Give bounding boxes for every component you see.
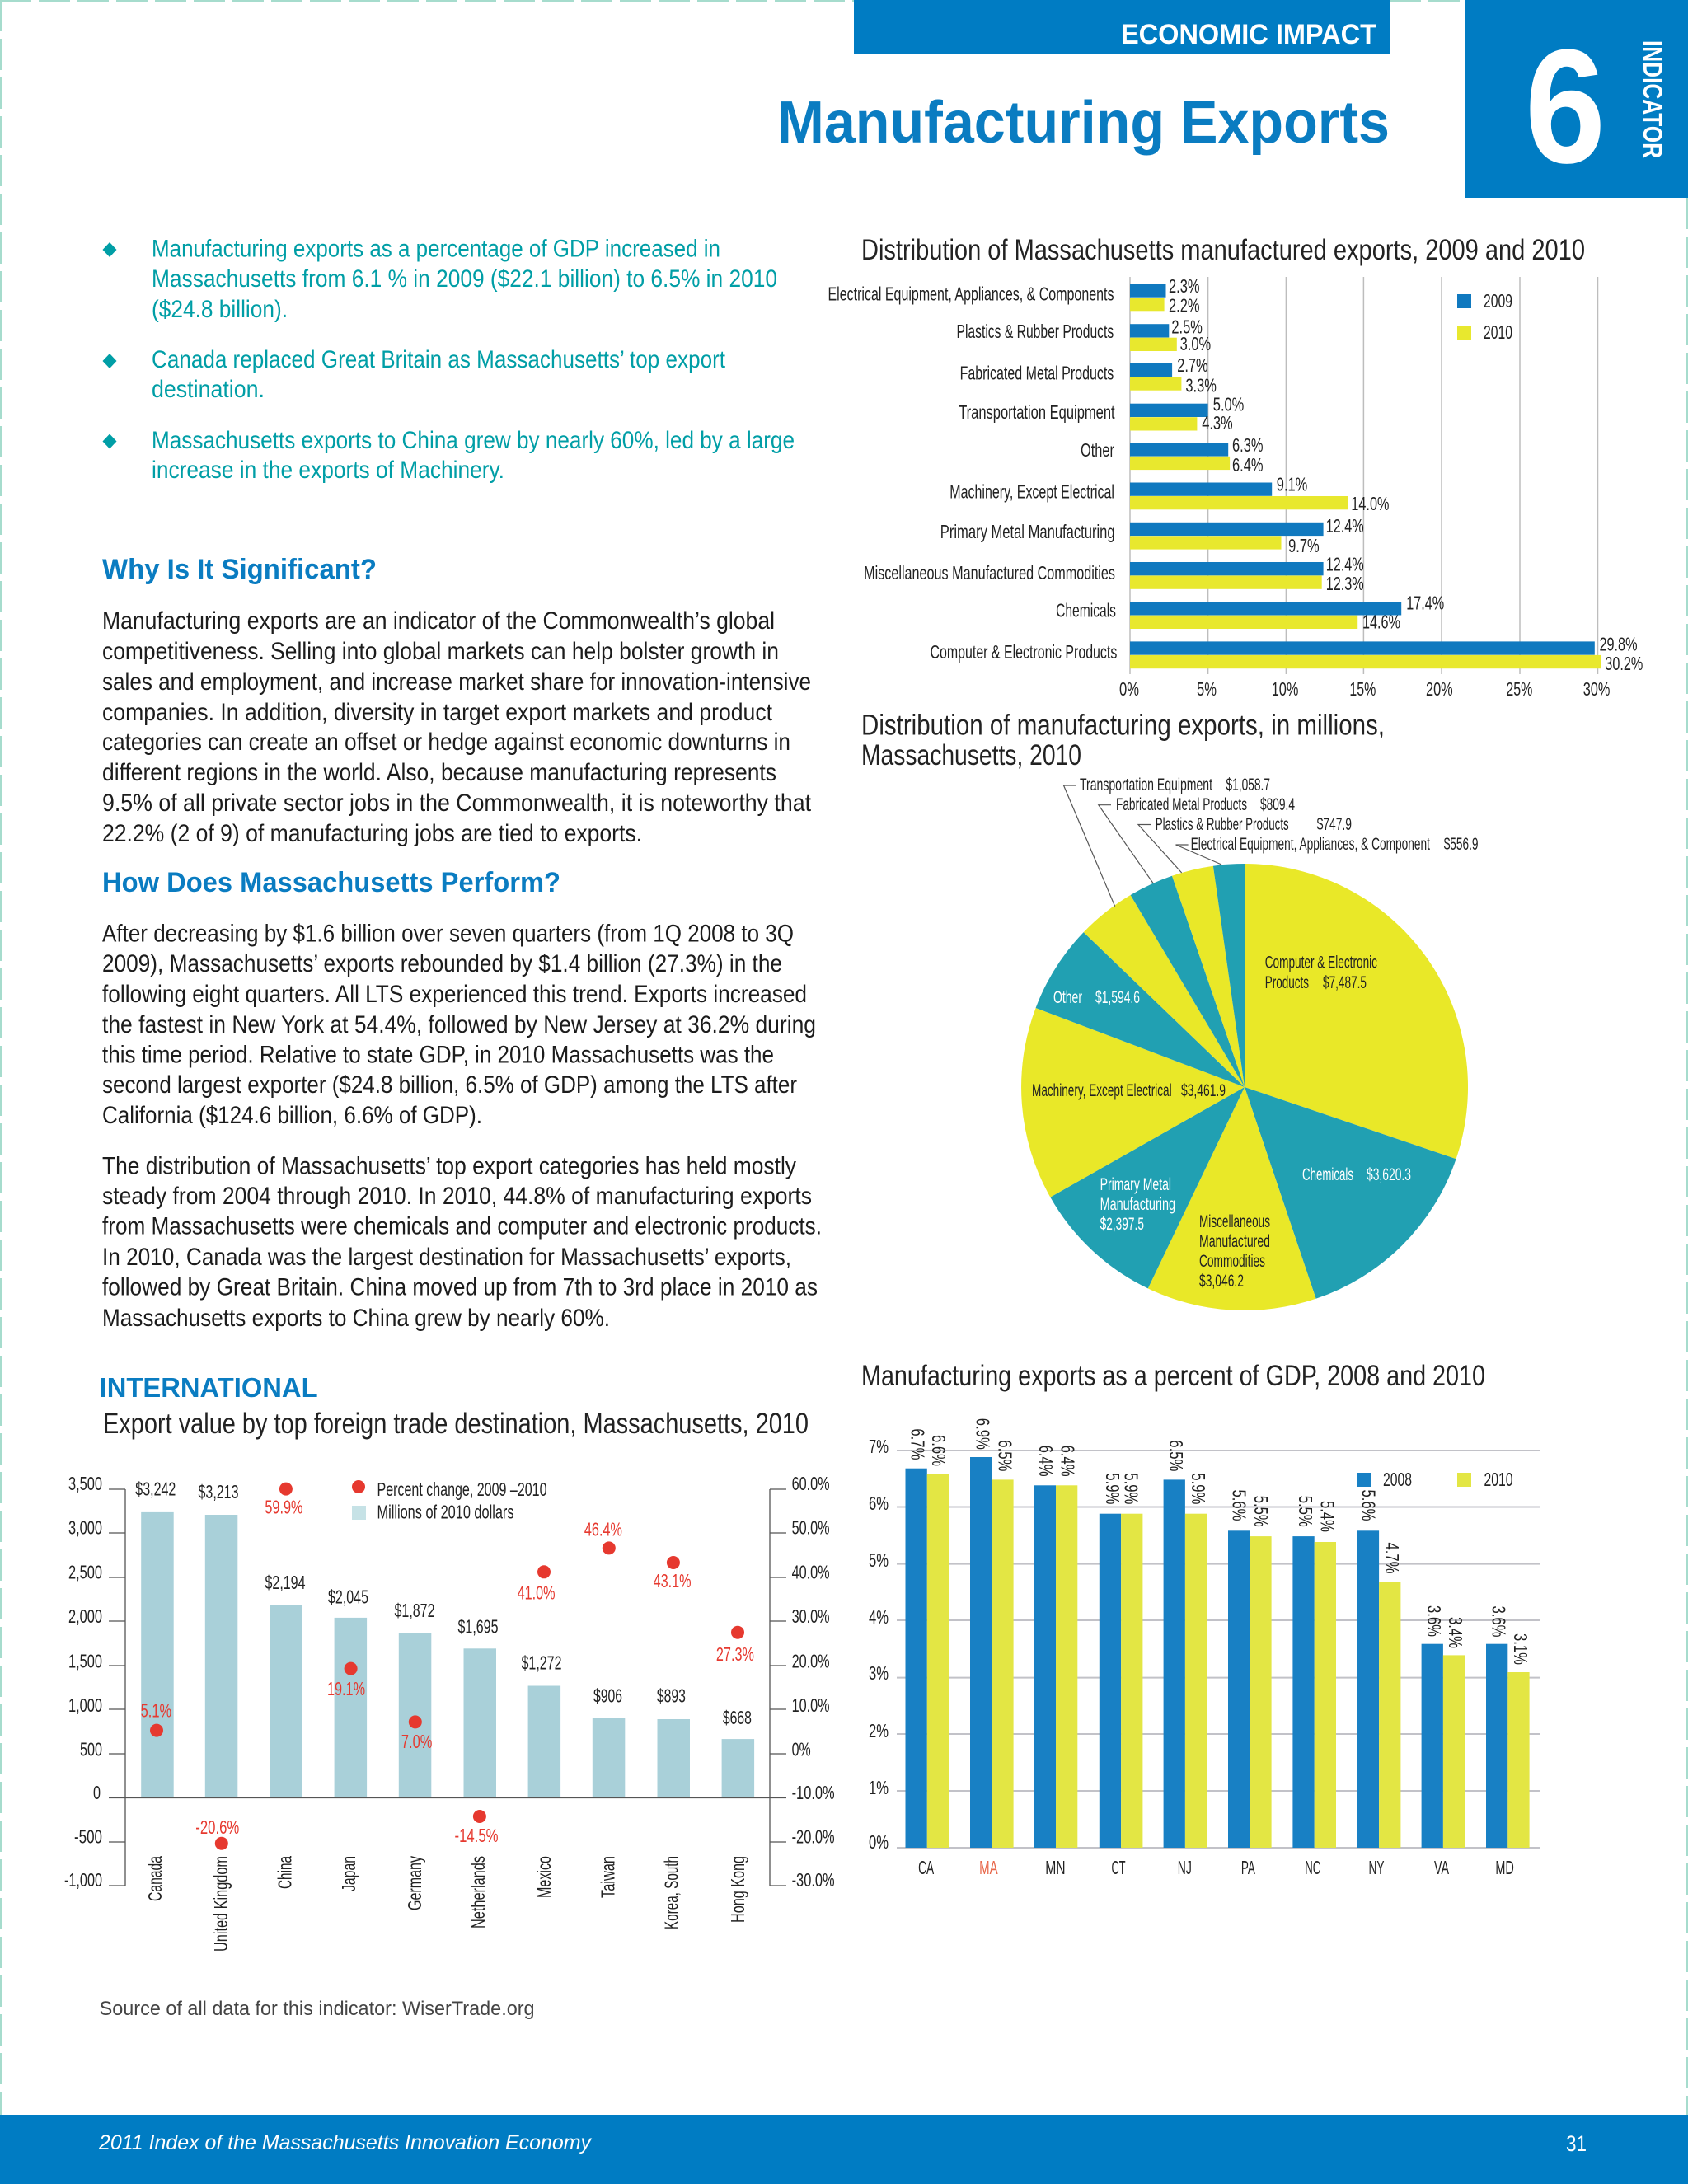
inner slice labels: Computer & Electronic	[1265, 954, 1377, 972]
left axis labels: 2,500	[68, 1561, 102, 1582]
bullet 3: increase in the exports of Machinery.	[152, 457, 504, 484]
bar value labels: 17.4%	[1406, 592, 1444, 613]
chart legend: 2010	[1484, 321, 1512, 343]
bar value labels: 4.3%	[1202, 412, 1233, 434]
y axis labels: 3%	[869, 1662, 889, 1684]
pie chart: manufacturing exports in millions	[1021, 776, 1479, 1310]
category labels: Plastics & Rubber Products	[956, 321, 1114, 342]
bullet 1	[102, 236, 777, 323]
bar value labels: $3,242	[135, 1479, 176, 1500]
chart legend	[1457, 290, 1512, 343]
rotated value labels: 6.5%	[994, 1440, 1015, 1471]
rotated value labels: 6.6%	[928, 1435, 950, 1466]
x axis labels: 5%	[1197, 678, 1217, 700]
combo chart: export value by destination	[64, 1473, 835, 1952]
rotated value labels: 3.6%	[1423, 1605, 1445, 1637]
footer bar: 2011 Index of the Massachusetts Innovation Economy	[98, 2131, 592, 2154]
text block: performance paragraph 1: following eight quarters. All LTS experienced this trend. Exports increased	[102, 981, 807, 1008]
callout labels with leaders	[1063, 776, 1479, 907]
right axis labels: -20.0%	[792, 1826, 835, 1848]
right axis labels: 40.0%	[792, 1561, 830, 1582]
callout labels with leaders: $809.4	[1260, 795, 1295, 814]
chart title: export value: Export value by top foreign trade destination, Massachusetts, 2010	[103, 1408, 809, 1440]
bar value labels: $2,045	[328, 1586, 368, 1607]
bar value labels: 2.3%	[1169, 275, 1200, 297]
bar value labels: 6.4%	[1232, 454, 1263, 476]
rotated value labels: 6.5%	[1165, 1440, 1187, 1471]
bar value labels: 6.3%	[1232, 434, 1263, 456]
column chart: exports as percent of GDP	[869, 1418, 1540, 1878]
callout labels with leaders: Transportation Equipment	[1080, 776, 1212, 794]
bullet 1: ($24.8 billion).	[152, 296, 288, 323]
bar value labels: 30.2%	[1605, 653, 1643, 674]
chart legend: Millions of 2010 dollars	[377, 1502, 514, 1523]
percent change labels: 7.0%	[401, 1731, 432, 1752]
text block: why is it significant: sales and employment, and increase market share for innovation-intensive	[102, 668, 811, 696]
bar value labels	[1169, 275, 1643, 674]
x axis labels: 0%	[1119, 678, 1139, 700]
bullet 3: Massachusetts exports to China grew by nearly 60%, led by a large	[152, 427, 795, 454]
x axis labels	[1119, 678, 1610, 700]
inner slice labels	[1032, 954, 1411, 1291]
country labels	[144, 1856, 748, 1952]
horizontal bar chart: export distribution	[828, 275, 1643, 700]
percent change labels: 41.0%	[518, 1582, 556, 1604]
rotated value labels: 3.1%	[1510, 1633, 1531, 1665]
country labels: Netherlands	[467, 1856, 489, 1929]
indicator badge: INDICATOR	[1638, 40, 1667, 158]
y axis labels: 5%	[869, 1549, 889, 1571]
text block: performance paragraph 2: from Massachusetts were chemicals and computer and electronic products.	[102, 1213, 822, 1240]
bar value labels	[135, 1479, 752, 1728]
inner slice labels: Miscellaneous	[1199, 1212, 1270, 1231]
text block: why is it significant: 22.2% (2 of 9) of manufacturing jobs are tied to exports.	[102, 820, 642, 847]
bar value labels: $3,213	[198, 1481, 239, 1502]
y axis labels: 2%	[869, 1720, 889, 1741]
chart legend	[352, 1479, 547, 1523]
x axis labels: 30%	[1583, 678, 1610, 700]
bar value labels: $893	[657, 1685, 686, 1706]
chart legend	[1357, 1469, 1513, 1490]
y axis labels: 4%	[869, 1606, 889, 1628]
percent change labels: 19.1%	[327, 1678, 365, 1699]
rotated value labels: 4.7%	[1381, 1543, 1403, 1574]
percent change labels: 27.3%	[716, 1643, 754, 1665]
right axis labels: -30.0%	[792, 1869, 835, 1891]
chart legend: 2008	[1383, 1469, 1412, 1490]
category labels: Computer & Electronic Products	[930, 641, 1117, 663]
rotated value labels: 5.5%	[1250, 1496, 1272, 1527]
text block: performance paragraph 1: California ($124.6 billion, 6.6% of GDP).	[102, 1102, 482, 1129]
state labels	[918, 1857, 1514, 1878]
bar value labels: 2.7%	[1177, 354, 1208, 376]
2010 bars	[1130, 298, 1601, 668]
bullet 2: destination.	[152, 376, 265, 403]
country labels: China	[274, 1856, 296, 1889]
indicator badge	[1465, 0, 1688, 198]
bar value labels: 5.0%	[1213, 393, 1244, 415]
rotated value labels: 5.4%	[1316, 1501, 1338, 1532]
text block: performance paragraph 2: steady from 2004 through 2010. In 2010, 44.8% of manufacturing exports	[102, 1183, 812, 1210]
state labels: NC	[1305, 1857, 1320, 1878]
inner slice labels: Machinery, Except Electrical	[1032, 1081, 1172, 1100]
bar value labels: 3.3%	[1185, 374, 1217, 396]
country labels: Germany	[404, 1856, 425, 1910]
y axis labels: 1%	[869, 1777, 889, 1798]
rotated value labels: 5.9%	[1102, 1473, 1123, 1504]
text block: why is it significant	[102, 607, 812, 847]
header banner: economic impact	[854, 0, 1390, 54]
heading: how does massachusetts perform: How Does Massachusetts Perform?	[102, 867, 560, 898]
x axis labels: 10%	[1272, 678, 1298, 700]
right axis labels: 20.0%	[792, 1650, 830, 1671]
bullet 3	[102, 427, 795, 484]
inner slice labels: Other	[1053, 988, 1082, 1007]
left axis labels: -500	[74, 1826, 102, 1848]
right axis labels: 0%	[792, 1739, 811, 1760]
chart title: distribution in millions	[861, 709, 1385, 771]
state labels: MA	[979, 1857, 998, 1878]
chart title: distribution in millions: Massachusetts, 2010	[861, 739, 1081, 771]
chart legend: 2009	[1484, 290, 1512, 312]
bar value labels: 9.1%	[1277, 473, 1307, 494]
inner slice labels: $1,594.6	[1095, 988, 1140, 1007]
chart legend: Percent change, 2009 –2010	[377, 1479, 547, 1500]
callout labels with leaders: Fabricated Metal Products	[1116, 795, 1247, 814]
percent change labels: 43.1%	[654, 1570, 692, 1591]
text block: why is it significant: different regions in the world. Also, because manufacturing represents	[102, 759, 776, 786]
rotated value labels: 6.4%	[1057, 1446, 1078, 1477]
x axis labels: 25%	[1506, 678, 1532, 700]
left axis labels: 3,000	[68, 1517, 102, 1539]
inner slice labels: $3,461.9	[1181, 1081, 1226, 1100]
indicator badge: 6	[1525, 16, 1606, 197]
right axis labels: 60.0%	[792, 1473, 830, 1494]
y axis labels: 0%	[869, 1831, 889, 1853]
bar value labels: $1,272	[521, 1652, 562, 1674]
inner slice labels: Primary Metal	[1100, 1175, 1171, 1194]
source note: Source of all data for this indicator: WiserTrade.org	[100, 1998, 535, 2020]
percent change labels: 46.4%	[584, 1518, 622, 1540]
bar value labels: 3.0%	[1180, 333, 1211, 354]
country labels: Mexico	[533, 1856, 555, 1898]
left axis labels: 2,000	[68, 1605, 102, 1627]
bar value labels: 12.4%	[1326, 515, 1364, 537]
left axis labels: 0	[93, 1782, 101, 1803]
inner slice labels: Products	[1265, 973, 1309, 992]
bar value labels: 14.6%	[1362, 611, 1400, 632]
left axis labels: 1,000	[68, 1694, 102, 1716]
rotated value labels: 6.7%	[907, 1428, 928, 1460]
y axis labels: 7%	[869, 1436, 889, 1457]
percent change labels: -20.6%	[195, 1816, 239, 1838]
text block: performance paragraph 2: The distribution of Massachusetts’ top export categories has held mostly	[102, 1153, 796, 1180]
percent change dots	[150, 1483, 744, 1850]
state labels: NY	[1368, 1857, 1385, 1878]
y axis labels	[869, 1436, 889, 1853]
bars: millions of 2010 dollars	[141, 1512, 754, 1798]
chart legend: 2010	[1484, 1469, 1513, 1490]
chart title: distribution in millions: Distribution of manufacturing exports, in millions,	[861, 709, 1385, 742]
bullet 1: Manufacturing exports as a percentage of GDP increased in	[152, 236, 720, 262]
text block: why is it significant: 9.5% of all private sector jobs in the Commonwealth, it is noteworthy that	[102, 790, 812, 817]
text block: performance paragraph 1: this time period. Relative to state GDP, in 2010 Massachusetts was the	[102, 1042, 774, 1068]
x axis labels: 15%	[1349, 678, 1376, 700]
bullet 2: Canada replaced Great Britain as Massachusetts’ top export	[152, 346, 726, 373]
inner slice labels: Manufactured	[1199, 1232, 1270, 1251]
left axis labels: 3,500	[68, 1473, 102, 1494]
rotated value labels: 3.4%	[1445, 1617, 1466, 1648]
inner slice labels: $3,620.3	[1367, 1165, 1411, 1184]
country labels: Taiwan	[597, 1856, 618, 1898]
text block: performance paragraph 1	[102, 921, 816, 1129]
inner slice labels: $3,046.2	[1199, 1272, 1244, 1291]
state labels: CA	[918, 1857, 934, 1878]
bullet 2	[102, 346, 726, 403]
chart title: percent of GDP: Manufacturing exports as a percent of GDP, 2008 and 2010	[861, 1360, 1485, 1392]
left axis labels	[64, 1473, 102, 1891]
category labels: Electrical Equipment, Appliances, & Components	[828, 284, 1114, 305]
rotated value labels: 3.6%	[1489, 1605, 1510, 1637]
percent change labels: -14.5%	[455, 1825, 498, 1846]
y axis labels: 6%	[869, 1493, 889, 1514]
country labels: Canada	[144, 1856, 166, 1901]
bar value labels: $906	[593, 1685, 622, 1706]
2009 bars	[1130, 284, 1595, 655]
bar value labels: $1,695	[458, 1616, 498, 1638]
state labels: MD	[1495, 1857, 1514, 1878]
text block: performance paragraph 1: After decreasing by $1.6 billion over seven quarters (from 1Q 2008 to 3Q	[102, 921, 794, 948]
bar value labels: $668	[723, 1707, 752, 1728]
left axis labels: -1,000	[64, 1869, 102, 1891]
right axis labels: -10.0%	[792, 1782, 835, 1803]
inner slice labels: Commodities	[1199, 1252, 1265, 1271]
rotated value labels: 5.6%	[1228, 1490, 1250, 1521]
country labels: Korea, South	[660, 1856, 682, 1929]
text block: performance paragraph 1: the fastest in New York at 54.4%, followed by New Jersey at 36.2% during	[102, 1011, 816, 1038]
bar value labels: 2.2%	[1169, 294, 1200, 316]
rotated value labels: 5.9%	[1121, 1473, 1142, 1504]
heading: international: INTERNATIONAL	[100, 1372, 318, 1403]
text block: why is it significant: companies. In addition, diversity in target export markets and product	[102, 699, 773, 726]
rotated value labels: 6.9%	[973, 1418, 994, 1450]
right axis labels	[792, 1473, 835, 1891]
bar value labels: 14.0%	[1351, 493, 1389, 514]
category labels: Miscellaneous Manufactured Commodities	[864, 562, 1115, 583]
text block: performance paragraph 2: In 2010, Canada was the largest destination for Massachusetts’ exports,	[102, 1244, 791, 1271]
category labels: Fabricated Metal Products	[960, 363, 1114, 384]
category labels: Machinery, Except Electrical	[950, 481, 1114, 503]
bar value labels: 29.8%	[1599, 633, 1637, 654]
category labels: Other	[1081, 439, 1114, 461]
bullet 1: Massachusetts from 6.1 % in 2009 ($22.1 billion) to 6.5% in 2010	[152, 265, 777, 293]
header banner: economic impact: ECONOMIC IMPACT	[1121, 19, 1376, 50]
country labels: Hong Kong	[727, 1856, 748, 1923]
rotated value labels: 6.4%	[1035, 1446, 1057, 1477]
key findings bullets	[102, 236, 795, 484]
inner slice labels: Manufacturing	[1100, 1195, 1175, 1214]
percent change labels	[141, 1497, 754, 1846]
state labels: CT	[1111, 1857, 1126, 1878]
callout labels with leaders: $1,058.7	[1226, 776, 1270, 794]
title: Manufacturing Exports	[777, 90, 1390, 156]
callout labels with leaders: Plastics & Rubber Products	[1156, 815, 1289, 834]
state labels: NJ	[1178, 1857, 1192, 1878]
text block: why is it significant: competitiveness. Selling into global markets can help bolster growth in	[102, 638, 779, 665]
2008 columns	[905, 1457, 1507, 1848]
2010 columns	[927, 1474, 1530, 1848]
state labels: VA	[1434, 1857, 1449, 1878]
country labels: Japan	[338, 1856, 359, 1891]
footer bar	[0, 2115, 1688, 2184]
state labels: MN	[1045, 1857, 1066, 1878]
category labels	[828, 284, 1117, 663]
right axis labels: 50.0%	[792, 1517, 830, 1539]
text block: performance paragraph 2: Massachusetts exports to China grew by nearly 60%.	[102, 1305, 610, 1332]
heading: why is it significant: Why Is It Significant?	[102, 554, 377, 585]
percent change labels: 59.9%	[265, 1497, 302, 1518]
inner slice labels: $7,487.5	[1323, 973, 1367, 992]
category labels: Transportation Equipment	[959, 401, 1115, 423]
text block: why is it significant: categories can create an offset or hedge against economic downturns in	[102, 729, 790, 756]
text block: performance paragraph 2: followed by Great Britain. China moved up from 7th to 3rd place in 2010 as	[102, 1274, 818, 1301]
text block: performance paragraph 1: second largest exporter ($24.8 billion, 6.5% of GDP) among the LTS after	[102, 1071, 797, 1099]
country labels: United Kingdom	[210, 1856, 232, 1952]
text block: performance paragraph 2	[102, 1153, 822, 1332]
x axis labels: 20%	[1426, 678, 1453, 700]
state labels: PA	[1241, 1857, 1255, 1878]
bar value labels: 12.3%	[1326, 573, 1364, 594]
callout labels with leaders: $556.9	[1444, 835, 1479, 854]
inner slice labels: Chemicals	[1302, 1165, 1353, 1184]
rotated value labels	[907, 1418, 1531, 1665]
left axis labels: 500	[80, 1739, 102, 1760]
right axis labels: 30.0%	[792, 1605, 830, 1627]
rotated value labels: 5.9%	[1188, 1473, 1209, 1504]
category labels: Primary Metal Manufacturing	[940, 521, 1115, 542]
inner slice labels: $2,397.5	[1100, 1215, 1144, 1234]
footer bar: 31	[1566, 2131, 1587, 2156]
callout labels with leaders: $747.9	[1317, 815, 1352, 834]
bar value labels: 2.5%	[1171, 316, 1203, 338]
rotated value labels: 5.6%	[1358, 1490, 1380, 1521]
bar value labels: 9.7%	[1288, 535, 1320, 556]
bar value labels: $1,872	[394, 1600, 435, 1621]
callout labels with leaders: Electrical Equipment, Appliances, & Component	[1191, 835, 1430, 854]
text block: performance paragraph 1: 2009), Massachusetts’ exports rebounded by $1.4 billion (27.3%) in the	[102, 950, 782, 977]
pie slices	[1021, 864, 1468, 1310]
percent change labels: 5.1%	[141, 1699, 171, 1721]
left axis labels: 1,500	[68, 1650, 102, 1671]
right axis labels: 10.0%	[792, 1694, 830, 1716]
category labels: Chemicals	[1056, 600, 1116, 621]
bar value labels: 12.4%	[1326, 553, 1364, 574]
text block: why is it significant: Manufacturing exports are an indicator of the Commonwealth’s global	[102, 607, 775, 635]
bar value labels: $2,194	[265, 1572, 306, 1593]
rotated value labels: 5.5%	[1295, 1496, 1316, 1527]
